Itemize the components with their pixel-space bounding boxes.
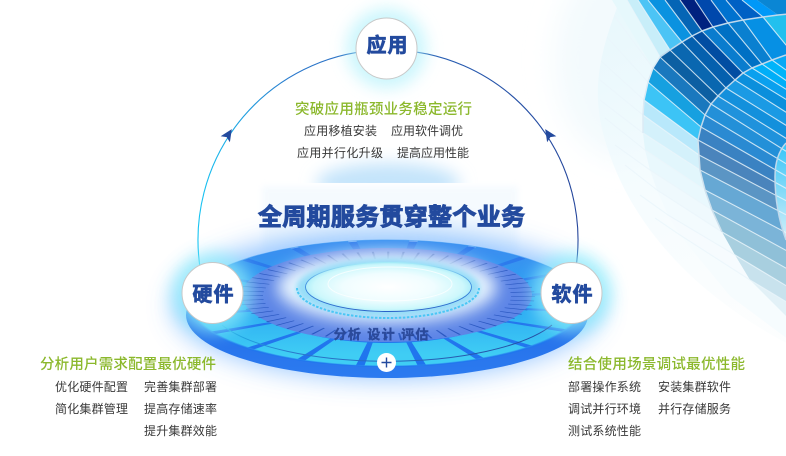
- node: 应用: 应用: [366, 33, 408, 57]
- title backlight glow: [266, 155, 514, 235]
- background: curved grid graphic: [555, 0, 786, 350]
- inner dark zone: [242, 248, 532, 342]
- main title: 全周期服务贯穿整个业务: [258, 204, 525, 231]
- node: 应用: [346, 8, 426, 88]
- text block: hardware: 完善集群部署: [144, 379, 217, 394]
- node: 软件: [532, 253, 612, 333]
- outer ring cells: [190, 240, 584, 366]
- text block: application: 应用移植安装: [304, 123, 377, 138]
- tick ring: [251, 255, 523, 337]
- text block: hardware: 提升集群效能: [144, 423, 217, 438]
- centre core: [306, 262, 472, 312]
- text block: application: 应用并行化升级: [297, 145, 383, 160]
- text block: hardware: 提高存储速率: [144, 401, 217, 416]
- node: 硬件: 硬件: [192, 283, 234, 306]
- text block: hardware: 优化硬件配置: [55, 380, 128, 394]
- text block: hardware: 简化集群管理: [55, 401, 128, 416]
- platform disc: [175, 233, 599, 378]
- text block: software: 安装集群软件: [658, 379, 731, 394]
- disc outer glow: [175, 233, 599, 377]
- cycle arc with arrows: [198, 50, 578, 361]
- plus button: [377, 353, 396, 372]
- text block: software: 并行存储服务: [658, 401, 731, 416]
- core rings: [328, 267, 452, 301]
- centre halo: [277, 251, 497, 323]
- arrow: left upward: [221, 126, 236, 142]
- disc side wall: [186, 252, 588, 378]
- node: 硬件: [172, 253, 252, 333]
- centre cyan ring: [296, 258, 480, 318]
- text block: application: 突破应用瓶颈业务稳定运行: [295, 100, 472, 118]
- node: 软件: 软件: [552, 283, 592, 306]
- text block: software: 部署操作系统: [568, 379, 641, 394]
- text block: application: 提高应用性能: [397, 145, 469, 160]
- text block: hardware: 分析用户需求配置最优硬件: [40, 356, 216, 373]
- text block: software: [568, 356, 746, 438]
- text block: software: 测试系统性能: [568, 423, 641, 438]
- text block: application: [295, 100, 472, 160]
- dashed ring: [297, 288, 479, 318]
- arrow: right upward: [541, 126, 556, 142]
- text block: application: 应用软件调优: [391, 123, 463, 138]
- disc label: 分析 设计 评估: [334, 327, 428, 342]
- text block: hardware: [40, 356, 217, 438]
- disc top face: [186, 241, 588, 367]
- text block: software: 调试并行环境: [568, 401, 641, 416]
- text block: software: 结合使用场景调试最优性能: [568, 356, 746, 373]
